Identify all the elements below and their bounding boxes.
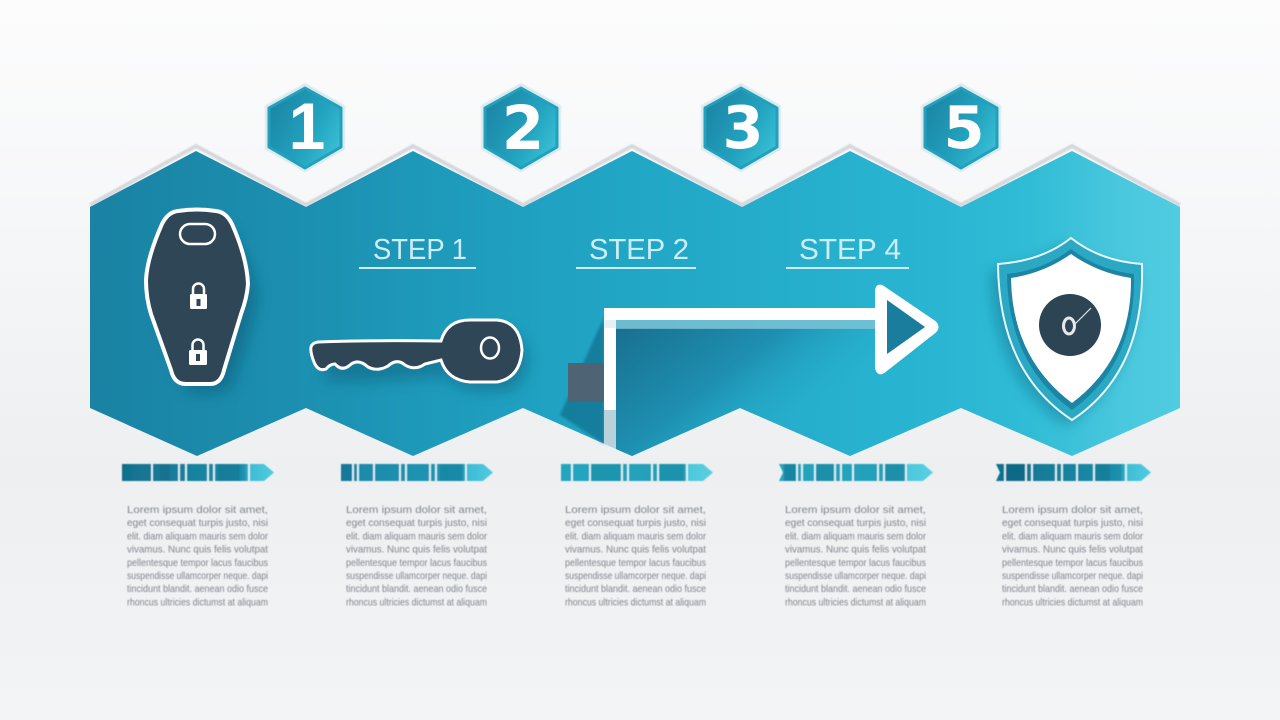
text block 3: Lorem ipsum dolor sit amet,	[565, 504, 706, 516]
text block 4: Lorem ipsum dolor sit amet,	[785, 504, 926, 516]
text block 2: Lorem ipsum dolor sit amet,	[346, 504, 487, 516]
number hexagon 5: 5	[943, 93, 985, 162]
icon: key fob	[146, 210, 257, 394]
text block 2: elit. diam aliquam mauris sem dolor	[346, 530, 487, 542]
text block 3: tincidunt blandit. aenean odio fusce	[565, 583, 706, 595]
text block 2: pellentesque tempor lacus faucibus	[346, 557, 487, 569]
text block 1: Lorem ipsum dolor sit amet,	[127, 504, 268, 516]
key hole	[481, 338, 499, 358]
text block 5: suspendisse ullamcorper neque. dapi	[1002, 570, 1143, 582]
dark tab	[568, 363, 604, 402]
ribbon 1	[122, 464, 274, 481]
text block 2: tincidunt blandit. aenean odio fusce	[346, 583, 487, 595]
icon: shield	[991, 238, 1142, 426]
text block 5	[1002, 504, 1143, 608]
number hexagon 2: 2	[502, 93, 544, 164]
text block 1: pellentesque tempor lacus faucibus	[127, 557, 268, 569]
arrow head	[876, 286, 938, 373]
ribbon 3	[561, 464, 713, 481]
text block 5: Lorem ipsum dolor sit amet,	[1002, 504, 1143, 516]
arrow shaft	[604, 308, 880, 449]
text block 3: rhoncus ultricies dictumst at aliquam	[565, 596, 706, 608]
text block 4: eget consequat turpis justo, nisi	[785, 517, 926, 529]
text block 3: pellentesque tempor lacus faucibus	[565, 557, 706, 569]
step label 4: STEP 4	[799, 234, 901, 266]
ribbon 5	[996, 464, 1151, 481]
text block 3	[565, 504, 706, 608]
text block 3: vivamus. Nunc quis felis volutpat	[565, 544, 706, 556]
step label 2: STEP 2	[589, 234, 689, 266]
text block 5: eget consequat turpis justo, nisi	[1002, 517, 1143, 529]
text block 5: rhoncus ultricies dictumst at aliquam	[1002, 596, 1143, 608]
ribbon 4	[779, 464, 933, 481]
text block 4: tincidunt blandit. aenean odio fusce	[785, 583, 926, 595]
number hexagon 5	[922, 84, 1000, 171]
text block 5: vivamus. Nunc quis felis volutpat	[1002, 544, 1143, 556]
icon: padlock upper	[190, 284, 207, 309]
text block 4: vivamus. Nunc quis felis volutpat	[785, 544, 926, 556]
hexagon band	[90, 146, 1180, 456]
text block 2: vivamus. Nunc quis felis volutpat	[346, 544, 487, 556]
text block 4: elit. diam aliquam mauris sem dolor	[785, 530, 926, 542]
text block 5: elit. diam aliquam mauris sem dolor	[1002, 530, 1143, 542]
text block 5: tincidunt blandit. aenean odio fusce	[1002, 583, 1143, 595]
text block 1: suspendisse ullamcorper neque. dapi	[127, 570, 268, 582]
number hexagon 3: 3	[722, 93, 764, 162]
number hexagon 1: 1	[289, 89, 325, 163]
text block 1	[127, 504, 268, 608]
recessed panel	[616, 328, 890, 456]
text block 5: pellentesque tempor lacus faucibus	[1002, 557, 1143, 569]
text block 4: suspendisse ullamcorper neque. dapi	[785, 570, 926, 582]
text block 3: eget consequat turpis justo, nisi	[565, 517, 706, 529]
text block 2: rhoncus ultricies dictumst at aliquam	[346, 596, 487, 608]
number hexagon 2	[482, 84, 560, 171]
text block 1: rhoncus ultricies dictumst at aliquam	[127, 596, 268, 608]
icon: key	[311, 320, 528, 391]
text block 2	[346, 504, 487, 608]
text block 1: eget consequat turpis justo, nisi	[127, 517, 268, 529]
number hexagon 1	[266, 84, 344, 171]
text block 1: tincidunt blandit. aenean odio fusce	[127, 583, 268, 595]
fob button	[180, 224, 215, 244]
text block 1: vivamus. Nunc quis felis volutpat	[127, 544, 268, 556]
text block 2: suspendisse ullamcorper neque. dapi	[346, 570, 487, 582]
number hexagon 3	[702, 84, 780, 171]
step label 1: STEP 1	[373, 234, 467, 266]
text block 4: pellentesque tempor lacus faucibus	[785, 557, 926, 569]
text block 1: elit. diam aliquam mauris sem dolor	[127, 530, 268, 542]
ribbon 2	[341, 464, 493, 481]
shield keyhole badge	[1039, 294, 1101, 356]
text block 3: elit. diam aliquam mauris sem dolor	[565, 530, 706, 542]
text block 4: rhoncus ultricies dictumst at aliquam	[785, 596, 926, 608]
text block 2: eget consequat turpis justo, nisi	[346, 517, 487, 529]
arrow panel	[560, 286, 938, 456]
icon: padlock lower	[189, 340, 207, 365]
text block 3: suspendisse ullamcorper neque. dapi	[565, 570, 706, 582]
text block 4	[785, 504, 926, 608]
